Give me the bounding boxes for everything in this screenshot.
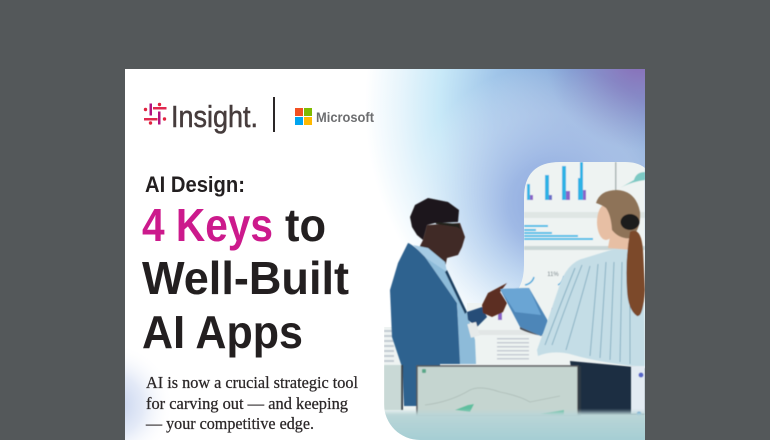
monitor line chart xyxy=(425,388,560,405)
laptop xyxy=(500,287,548,336)
title words: 4 Keys: 4 Keys xyxy=(142,199,273,251)
body text: — your competitive edge. xyxy=(145,414,314,433)
title line 2: Well-Built xyxy=(142,252,349,304)
logo: Microsoft xyxy=(295,108,374,125)
icon: Microsoft squares xyxy=(295,108,312,125)
jacket xyxy=(390,243,461,406)
title xyxy=(142,199,349,358)
neck and face xyxy=(418,223,465,268)
card background xyxy=(125,69,645,440)
logo: Insight xyxy=(144,99,258,134)
sleeve xyxy=(467,307,487,327)
small teal chart xyxy=(623,172,645,186)
lapel edge xyxy=(445,270,467,314)
shirt xyxy=(425,257,476,364)
hand xyxy=(482,283,507,317)
collar xyxy=(413,245,447,272)
badge xyxy=(467,322,480,338)
heading: AI Design: AI Design: xyxy=(145,172,245,197)
title word: to: to xyxy=(285,199,326,251)
man xyxy=(390,198,507,406)
bar chart xyxy=(527,162,586,200)
glasses xyxy=(436,222,460,229)
body text: for carving out — and keeping xyxy=(146,394,348,413)
woman xyxy=(537,190,645,415)
dashboard wall xyxy=(384,162,645,412)
wordmark: Microsoft: Microsoft xyxy=(316,109,374,125)
body text: AI is now a crucial strategic tool xyxy=(146,373,358,392)
monitors and desk xyxy=(380,365,650,440)
donut label: 11% xyxy=(547,272,559,278)
hair xyxy=(410,198,459,240)
icon: Insight mark xyxy=(144,103,166,125)
horizontal bars xyxy=(524,225,593,240)
desk foreground xyxy=(380,412,650,440)
wordmark: Insight: Insight. xyxy=(171,99,258,134)
photo: two colleagues in front of dashboard xyxy=(380,160,650,440)
title line 3: AI Apps xyxy=(142,306,303,358)
divider line xyxy=(273,97,275,132)
body text xyxy=(145,373,358,433)
donut gauges xyxy=(525,276,564,285)
